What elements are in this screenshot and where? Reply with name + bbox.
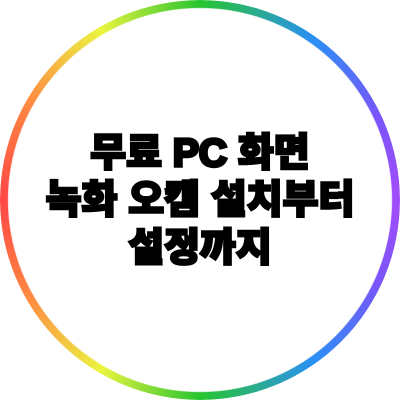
title line 1: 무료 PC 화면 [90, 132, 310, 175]
title [46, 132, 354, 270]
title line 3: 설정까지 [128, 227, 272, 270]
title line 2: 녹화 오캠 설치부터 [46, 179, 354, 222]
